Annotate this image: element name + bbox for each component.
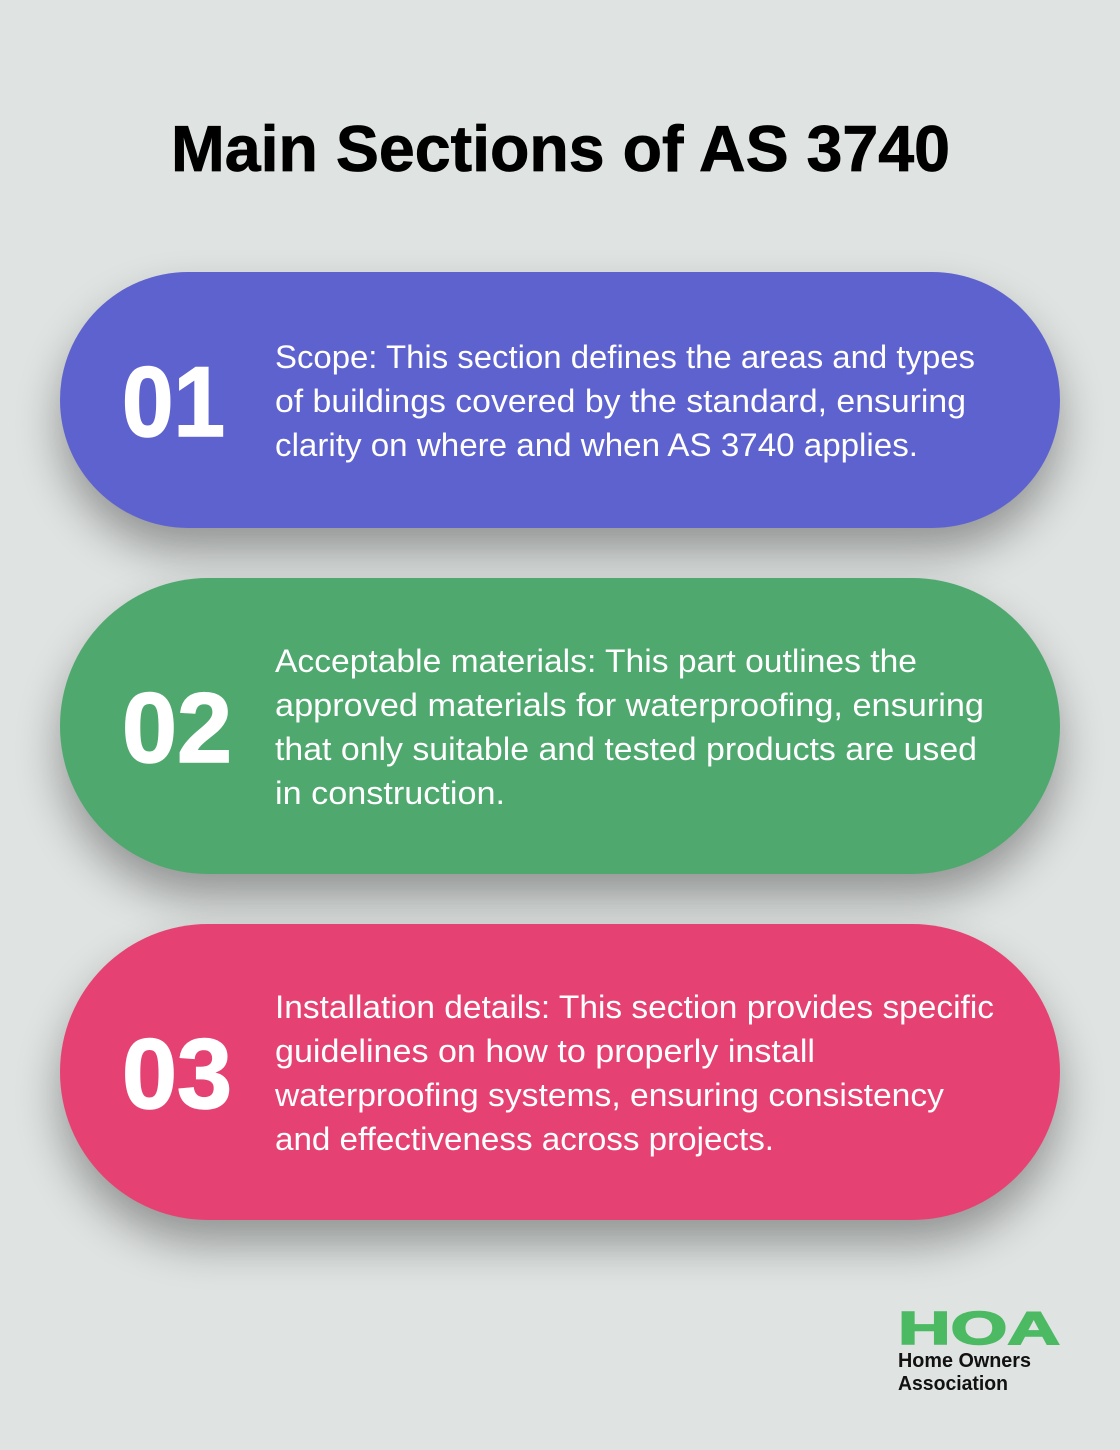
panel: 01 scope — [60, 272, 1060, 552]
text: materials description: in construction. — [275, 775, 505, 811]
text: installation description: and effectiveness across projects. — [275, 1121, 774, 1157]
text: installation description: guidelines on how to properly install — [275, 1033, 815, 1069]
text: scope description — [275, 339, 975, 463]
text: materials description: Acceptable materials: This part outlines the — [275, 643, 917, 679]
text: installation description: Installation details: This section provides specific — [275, 989, 994, 1025]
logo: HOA Home Owners Association: Home Owners — [898, 1350, 1031, 1372]
text: materials description: that only suitable and tested products are used — [275, 731, 977, 767]
number 02: 02 — [122, 672, 232, 783]
number 01: 01 — [122, 346, 225, 457]
text: installation description: waterproofing systems, ensuring consistency — [274, 1077, 945, 1113]
logo: HOA Home Owners Association — [898, 1302, 1060, 1395]
text: materials description: approved materials for waterproofing, ensuring — [275, 687, 984, 723]
text: scope description: of buildings covered by the standard, ensuring — [275, 383, 966, 419]
panel: 02 acceptable materials — [60, 578, 1060, 898]
title: Main Sections of AS 3740 — [171, 112, 950, 185]
number 03: 03 — [122, 1018, 232, 1129]
text: scope description: clarity on where and when AS 3740 applies. — [275, 427, 918, 463]
text: materials description — [275, 643, 984, 811]
logo: HOA Home Owners Association: Association — [898, 1373, 1008, 1395]
text: installation description — [274, 989, 994, 1157]
logo: HOA Home Owners Association: HOA — [898, 1302, 1060, 1354]
text: scope description: Scope: This section defines the areas and types — [275, 339, 975, 375]
panel: 03 installation details — [60, 924, 1060, 1244]
